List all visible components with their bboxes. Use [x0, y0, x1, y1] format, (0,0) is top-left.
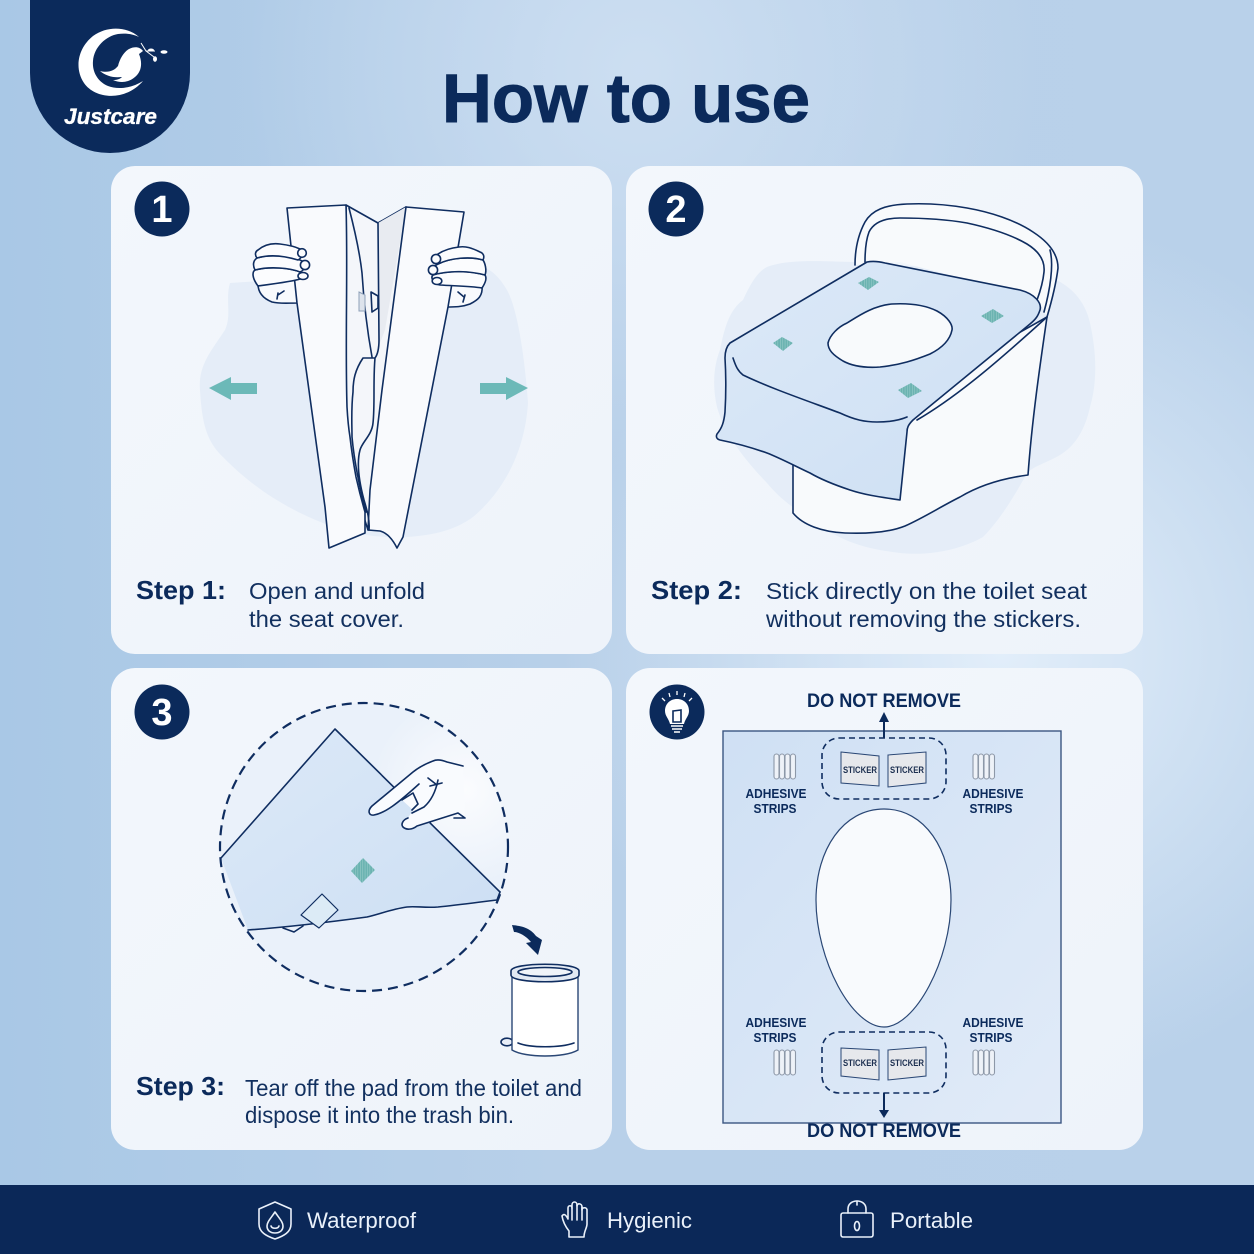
badge number 3 — [134, 684, 190, 740]
step 1 text: Open and unfold — [249, 578, 425, 604]
adhesive strips bottom left: STRIPS — [754, 1030, 797, 1045]
bottom sticker group — [822, 1032, 946, 1093]
bottom sticker group: STICKER — [890, 1058, 924, 1068]
icon: portable lock — [841, 1201, 873, 1237]
panel: step 2 — [626, 166, 1143, 654]
left fingers — [253, 244, 310, 286]
seat cover sheet — [723, 731, 1061, 1123]
adhesive strips top left: STRIPS — [754, 801, 797, 816]
step 2 text: without removing the stickers. — [765, 606, 1081, 632]
step 3 text: Step 3: — [136, 1071, 225, 1101]
panel: step 1 — [111, 166, 612, 654]
icon: waterproof shield — [259, 1202, 291, 1239]
logo badge — [30, 0, 190, 153]
step 2 text: Step 2: — [651, 575, 742, 605]
label: hygienic: Hygienic — [607, 1208, 692, 1233]
tab on pad — [301, 894, 338, 928]
folded cover centre — [345, 205, 406, 530]
badge number 1 — [134, 182, 190, 236]
step 2 text: Stick directly on the toilet seat — [766, 578, 1088, 604]
seat cover — [716, 261, 1040, 500]
right cover panel — [368, 207, 464, 548]
top sticker group: STICKER — [843, 765, 877, 775]
icon: toilet with seat cover — [716, 204, 1058, 533]
badge number 2: 2 — [665, 189, 687, 231]
badge number 1: 1 — [151, 189, 173, 231]
icon: trash bin — [501, 964, 579, 1056]
label: portable: Portable — [890, 1208, 973, 1233]
adhesive strips top right — [962, 754, 1024, 816]
title: How to use — [442, 60, 810, 137]
step 2 text — [651, 575, 1088, 632]
arrow: left — [209, 377, 257, 400]
adhesive strips bottom left: ADHESIVE — [746, 1015, 807, 1030]
seat opening — [816, 809, 951, 1027]
arrow: right — [480, 377, 528, 400]
adhesive strips bottom left — [746, 1015, 807, 1075]
toilet lid — [855, 204, 1058, 317]
step 3 text: Tear off the pad from the toilet and — [245, 1075, 582, 1101]
top sticker group: STICKER — [890, 765, 924, 775]
badge number 3: 3 — [151, 692, 173, 734]
top do not remove label — [807, 690, 961, 738]
logo crescent and dove — [78, 29, 168, 96]
bottom sticker group: STICKER — [843, 1058, 877, 1068]
left palm — [258, 280, 298, 303]
top sticker group — [822, 738, 946, 799]
step 3 text — [136, 1071, 582, 1128]
adhesive strips bottom right — [962, 1015, 1024, 1075]
panel: step 3 — [111, 668, 612, 1150]
adhesive strips top right: ADHESIVE — [962, 786, 1024, 801]
icon: hands unfolding seat cover — [253, 205, 486, 548]
right fingers — [428, 247, 486, 288]
dashed circle — [220, 703, 508, 991]
left cover panel — [287, 205, 365, 548]
step 1 text: Step 1: — [136, 575, 226, 605]
adhesive strips top left — [746, 754, 807, 816]
label: waterproof: Waterproof — [307, 1208, 417, 1233]
bottom do not remove label — [807, 1093, 961, 1142]
badge number 2 — [648, 182, 704, 236]
torn pad — [221, 729, 500, 930]
bottom do not remove label: DO NOT REMOVE — [807, 1120, 961, 1142]
adhesive patches — [773, 277, 1004, 398]
adhesive strips bottom right: STRIPS — [970, 1030, 1013, 1045]
adhesive strips bottom right: ADHESIVE — [962, 1015, 1024, 1030]
step 3 text: dispose it into the trash bin. — [245, 1102, 514, 1128]
icon: hygienic hand — [562, 1202, 587, 1237]
adhesive patch — [351, 858, 375, 883]
hand — [369, 760, 465, 829]
arrow: into bin — [512, 925, 542, 955]
icon: tearing pad in dashed circle — [220, 728, 501, 933]
step 1 text: the seat cover. — [249, 606, 404, 632]
step 1 background blob — [200, 267, 528, 537]
footer bar — [0, 1185, 1254, 1254]
right palm — [446, 280, 482, 307]
brand name: Justcare — [64, 104, 157, 129]
seat hole — [828, 304, 952, 367]
step 1 text — [136, 575, 425, 632]
toilet bowl — [793, 317, 1047, 533]
adhesive strips top right: STRIPS — [970, 801, 1013, 816]
top do not remove label: DO NOT REMOVE — [807, 690, 961, 712]
panel: tip diagram — [626, 668, 1143, 1150]
icon: light bulb badge — [650, 684, 704, 740]
adhesive strips top left: ADHESIVE — [746, 786, 807, 801]
step 2 background blob — [714, 261, 1095, 554]
